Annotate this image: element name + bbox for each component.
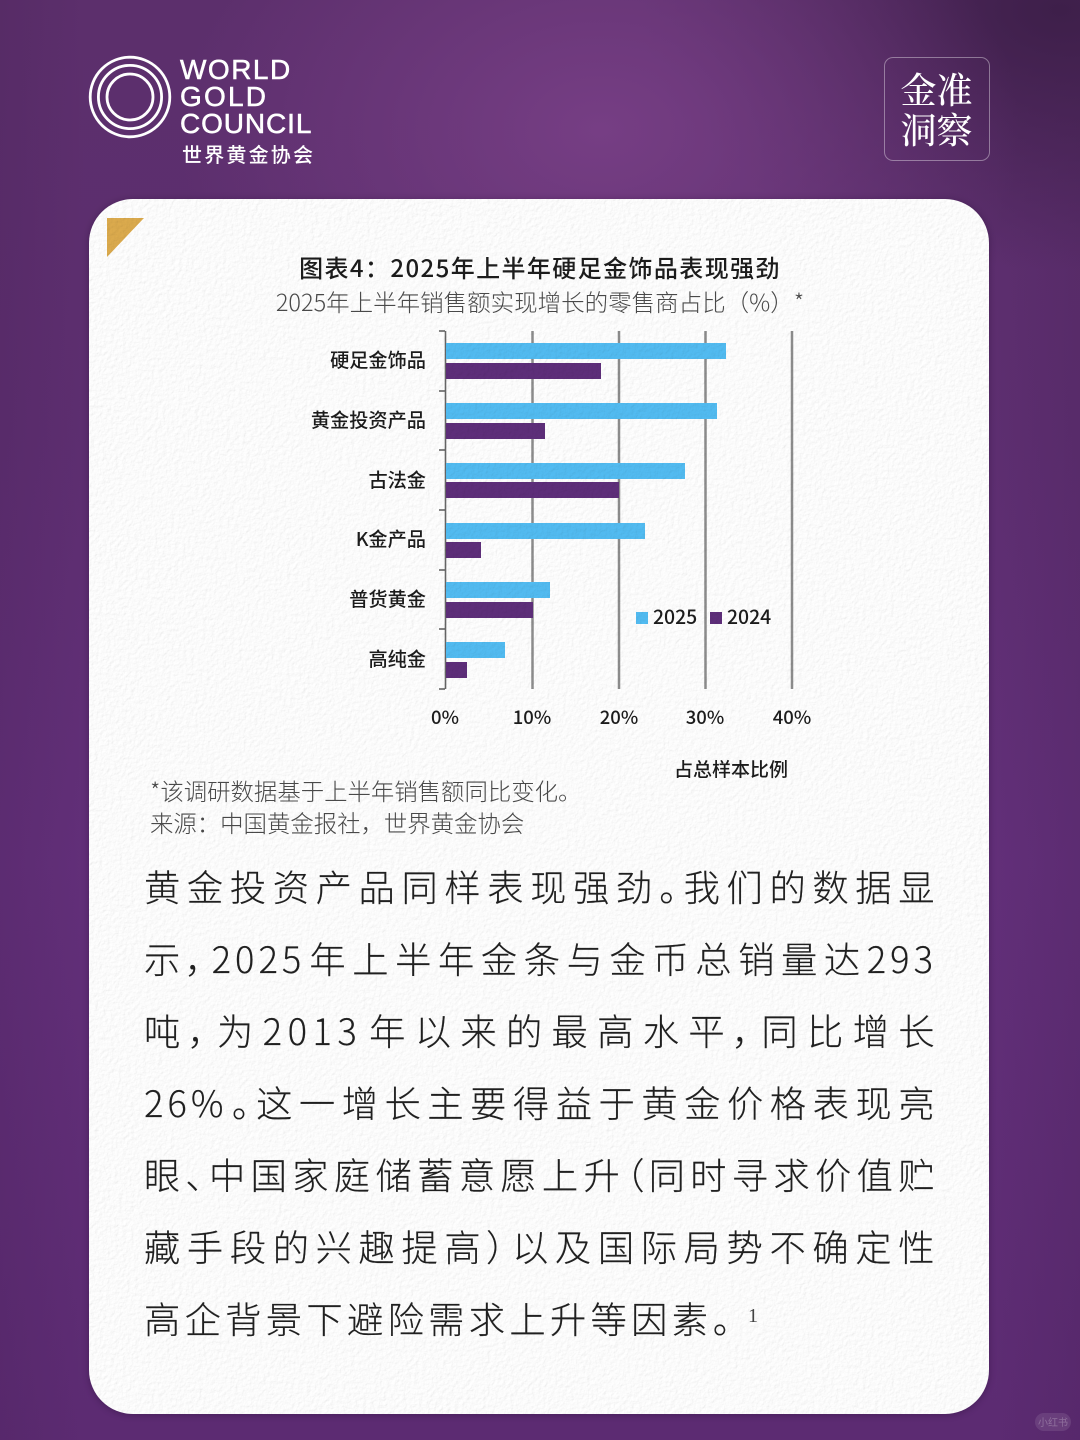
legend	[653, 601, 771, 630]
x axis title: 占总样本比例	[674, 755, 788, 782]
body text: 高企背景下避险需求上升等因素。	[144, 1292, 733, 1344]
category labels: K金产品	[356, 524, 426, 552]
chart title: 图表4：2025年上半年硬足金饰品表现强劲	[299, 249, 781, 284]
watermark	[1035, 1413, 1071, 1431]
x axis labels	[431, 704, 811, 730]
body text: 吨，为2013年以来的最高水平，同比增长	[144, 1004, 937, 1056]
logo wordmark: WORLD	[180, 54, 292, 85]
body text: 示，2025年上半年金条与金币总销量达293	[144, 932, 937, 984]
category labels: 硬足金饰品	[330, 345, 426, 373]
icon: gold corner triangle	[107, 218, 144, 257]
legend: 2024	[727, 601, 771, 630]
category labels: 高纯金	[368, 644, 426, 672]
logo: World Gold Council	[88, 54, 315, 168]
panel: white paper card	[89, 199, 989, 1414]
body text: 黄金投资产品同样表现强劲。我们的数据显	[144, 860, 937, 912]
x axis labels: 40%	[773, 704, 811, 730]
watermark: 小红书	[1038, 1414, 1068, 1429]
category labels	[311, 345, 426, 672]
x axis labels: 0%	[431, 704, 459, 730]
footnote marker: 1	[748, 1305, 758, 1327]
bar chart	[439, 330, 794, 690]
x axis labels: 30%	[686, 704, 724, 730]
x axis labels: 20%	[600, 704, 638, 730]
category labels: 普货黄金	[349, 584, 426, 612]
body text: 26%。这一增长主要得益于黄金价格表现亮	[144, 1076, 937, 1128]
badge: 金准洞察: 洞察	[900, 103, 972, 154]
logo wordmark: GOLD	[180, 81, 268, 112]
body text: 藏手段的兴趣提高）以及国际局势不确定性	[144, 1220, 937, 1272]
logo wordmark	[180, 54, 312, 139]
logo Chinese name: 世界黄金协会	[182, 139, 315, 168]
footnote: 来源：中国黄金报社，世界黄金协会	[150, 805, 524, 839]
badge: 金准洞察	[884, 57, 990, 161]
body text: 眼、中国家庭储蓄意愿上升（同时寻求价值贮	[144, 1148, 937, 1200]
category labels: 古法金	[368, 465, 426, 493]
body text	[144, 860, 937, 1344]
x axis labels: 10%	[513, 704, 551, 730]
icon: concentric rings	[88, 56, 172, 138]
logo wordmark: COUNCIL	[180, 108, 312, 139]
footnote: *该调研数据基于上半年销售额同比变化。	[150, 773, 581, 807]
legend: 2025	[653, 601, 697, 630]
footnote	[150, 773, 581, 839]
paper texture overlay	[89, 199, 989, 1414]
chart subtitle: 2025年上半年销售额实现增长的零售商占比（%）*	[276, 284, 804, 318]
category labels: 黄金投资产品	[311, 405, 426, 433]
badge: 金准洞察: 金准	[900, 63, 972, 114]
